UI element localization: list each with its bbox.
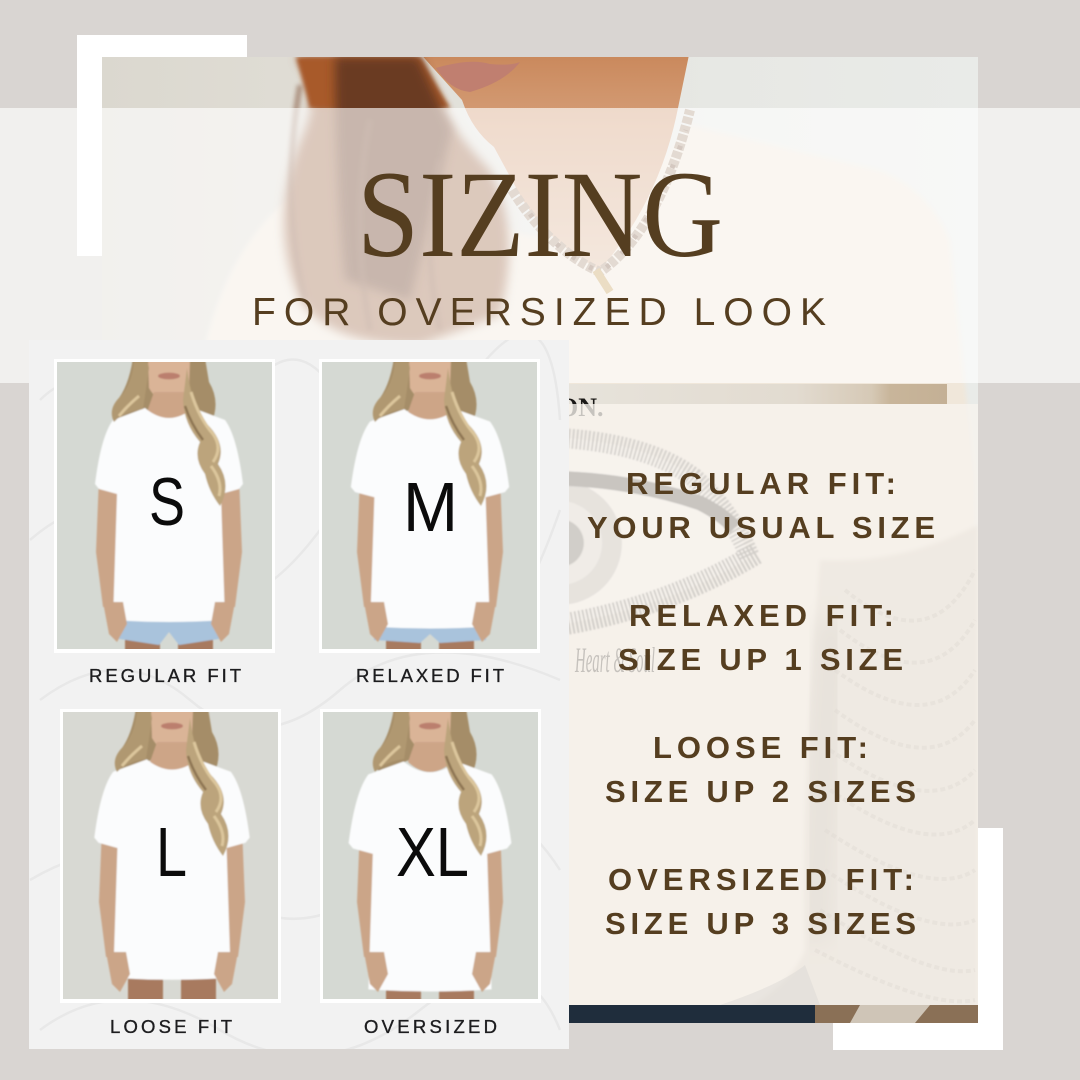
size letters XL: XL [396, 813, 469, 891]
photo card: regular fit, size S [54, 358, 275, 677]
regular fit advice [587, 466, 935, 545]
translucent text panel [569, 404, 978, 1005]
size letter L: L [156, 813, 187, 891]
label: relaxed fit: RELAXED FIT [356, 665, 504, 686]
jeans [560, 1005, 816, 1023]
white corner frame: top left [77, 35, 247, 256]
white corner frame: bottom right [833, 828, 1003, 1050]
neck and chin [417, 50, 690, 270]
necklace [512, 110, 690, 292]
graphic on shirt: eye print [569, 428, 762, 635]
title: SIZING [357, 146, 723, 283]
relaxed fit advice: RELAXED FIT: [629, 598, 894, 633]
loose fit advice: LOOSE FIT: [653, 730, 868, 765]
relaxed fit advice: SIZE UP 1 SIZE [618, 642, 903, 677]
oversized fit advice: OVERSIZED FIT: [608, 862, 914, 897]
photo card: loose fit, size L [60, 708, 281, 1027]
background photo: woman in cream t-shirt [210, 57, 978, 1023]
red hair [284, 57, 509, 345]
print text on shirt: ON. [558, 393, 604, 422]
jeans waistband under shirt [720, 965, 820, 1005]
size letter S: S [149, 464, 185, 540]
relaxed fit advice [618, 598, 903, 677]
subtitle: FOR OVERSIZED LOOK [252, 291, 826, 334]
regular fit advice: REGULAR FIT: [626, 466, 896, 501]
sweater sleeve [810, 569, 976, 1004]
regular fit advice: YOUR USUAL SIZE [587, 510, 935, 545]
loose fit advice: SIZE UP 2 SIZES [605, 774, 916, 809]
sizing guide text [587, 466, 935, 941]
photo card: oversized, size XL [320, 708, 541, 1027]
label: loose fit: LOOSE FIT [110, 1016, 232, 1037]
oversized fit advice: SIZE UP 3 SIZES [605, 906, 916, 941]
label: regular fit: REGULAR FIT [89, 665, 241, 686]
photo card: relaxed fit, size M [319, 358, 540, 677]
panel: size comparison [29, 333, 569, 1056]
oversized fit advice [605, 862, 916, 941]
text: Heart & Soul [575, 640, 655, 680]
size letter M: M [403, 468, 458, 546]
label: oversized: OVERSIZED [364, 1016, 497, 1037]
loose fit advice [605, 730, 916, 809]
translucent title band [0, 108, 1080, 383]
lips [436, 62, 520, 92]
